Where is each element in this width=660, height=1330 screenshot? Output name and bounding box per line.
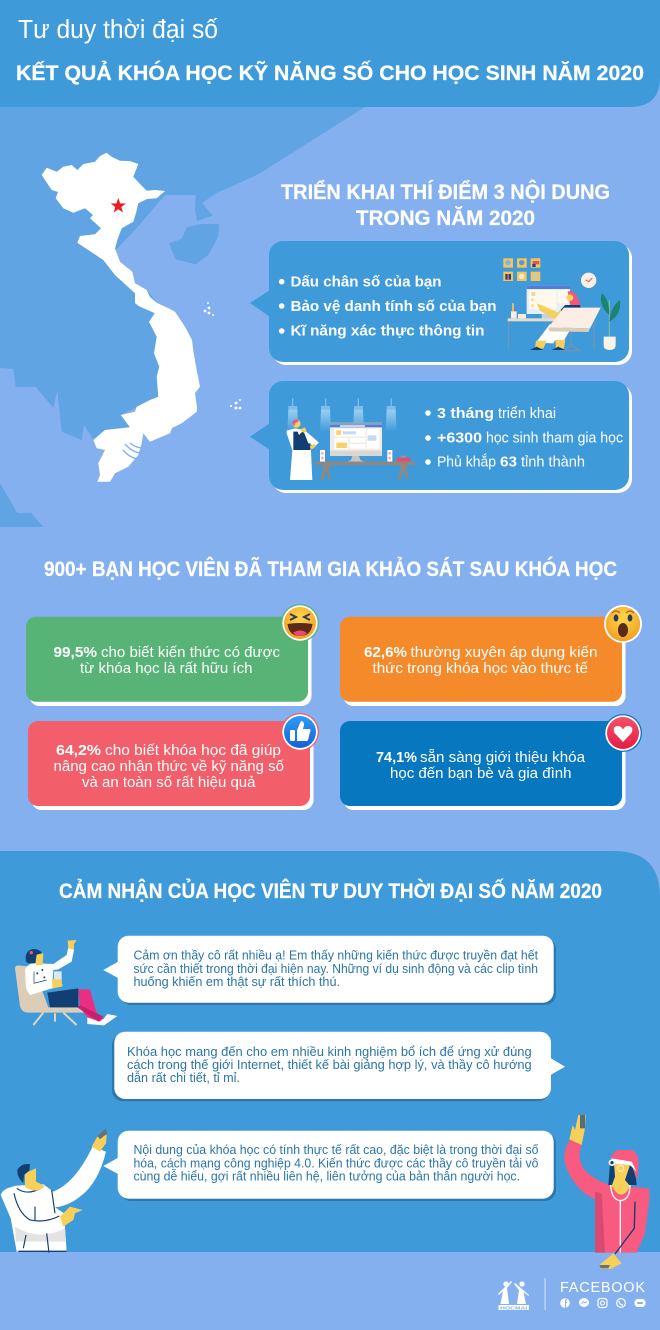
- footer: facebook and social icons: FACEBOOK: [560, 1280, 645, 1296]
- card: 62,6%: 62,6%: [364, 644, 407, 661]
- quote bubble 1: Cảm ơn thầy cô rất nhiều ạ! Em thấy những kiến thức được truyền đạt hết: [134, 948, 539, 962]
- card: 74,1%: [340, 714, 642, 810]
- icon: thumbs up: [281, 713, 319, 751]
- card: 64,2%: [28, 713, 319, 810]
- map of Vietnam: [42, 153, 241, 482]
- card: 64,2%: nâng cao nhận thức về kỹ năng số: [54, 758, 285, 775]
- card: 99,5%: cho biết kiến thức có được: [101, 644, 280, 661]
- quote bubble 2: dẫn rất chi tiết, tỉ mỉ.: [127, 1070, 240, 1085]
- icon: surprised emoji: [604, 605, 642, 643]
- islands: [204, 302, 241, 410]
- heading: feedback: CẢM NHẬN CỦA HỌC VIÊN TƯ DUY THỜI ĐẠI SỐ NĂM 2020: [59, 877, 602, 903]
- card: 74,1%: sẵn sàng giới thiệu khóa: [420, 749, 586, 766]
- quote bubble 3: [103, 1131, 556, 1201]
- heading: pilot: TRIỂN KHAI THÍ ĐIỂM 3 NỘI DUNG: [281, 179, 610, 204]
- footer: logo: [498, 1281, 529, 1310]
- footer divider: [544, 1278, 546, 1310]
- card: 64,2%: 64,2%: [56, 742, 101, 759]
- quote bubble 3: hóa, cách mạng công nghiệp 4.0. Kiến thức được các thầy cô truyền tải vô: [134, 1156, 539, 1170]
- numbers list: triển khai: [498, 406, 556, 422]
- numbers list: 63: [500, 454, 517, 470]
- numbers list: học sinh tham gia học: [486, 430, 623, 446]
- footer: facebook and social icons: [560, 1280, 646, 1308]
- card: 64,2%: cho biết khóa học đã giúp: [105, 742, 281, 759]
- quote bubble 2: cách trong thế giới Internet, thiết kế bài giảng hợp lý, và thầy cô hướng: [127, 1058, 532, 1072]
- quote bubble 2: Khóa học mang đến cho em nhiều kinh nghiệm bổ ích để ứng xử đúng: [127, 1045, 532, 1059]
- panel: student feedback background: [0, 851, 660, 1252]
- panel: key numbers: [250, 381, 632, 493]
- card: 99,5%: [26, 604, 319, 706]
- footer: logo: HOCMAI: [500, 1305, 527, 1310]
- numbers list: 3 tháng: [437, 405, 494, 422]
- icon: laughing emoji: [281, 604, 319, 642]
- main title: KẾT QUẢ KHÓA HỌC KỸ NĂNG SỐ CHO HỌC SINH NĂM 2020: [16, 59, 644, 85]
- heading: pilot: [281, 179, 610, 230]
- quote bubble 3: Nội dung của khóa học có tính thực tế rất cao, đặc biệt là trong thời đại số: [134, 1143, 539, 1157]
- card: 62,6%: [340, 605, 642, 706]
- card: 74,1%: 74,1%: [376, 749, 417, 766]
- card: 62,6%: thường xuyên áp dụng kiến: [410, 644, 598, 661]
- card: 99,5%: từ khóa học là rất hữu ích: [80, 660, 252, 677]
- illustration: seated woman: [15, 940, 117, 1025]
- numbers list: Phủ khắp: [437, 454, 496, 470]
- quote bubble 2: [112, 1032, 565, 1101]
- illustration: man pointing: [1, 1129, 107, 1253]
- topic list: Kĩ năng xác thực thông tin: [290, 322, 484, 340]
- star marker: [111, 198, 126, 212]
- quote bubble 1: sức cần thiết trong thời đại hiện nay. Những ví dụ sinh động và các clip tình: [134, 962, 538, 976]
- numbers list: [425, 405, 623, 470]
- numbers list: tỉnh thành: [521, 454, 585, 470]
- topic list: Dấu chân số của bạn: [290, 274, 442, 290]
- heading: pilot: TRONG NĂM 2020: [356, 205, 535, 230]
- card: 74,1%: học đến bạn bè và gia đình: [390, 765, 572, 782]
- card: 64,2%: và an toàn số rất hiệu quả: [82, 774, 256, 791]
- illustration: man at computer: [287, 398, 415, 480]
- quote bubble 3: cùng dễ hiểu, gợi rất nhiều liên hệ, liên tưởng của bản thân người học.: [134, 1168, 520, 1183]
- subtitle: Tư duy thời đại số: [18, 16, 218, 44]
- illustration: woman at desk: [503, 258, 620, 351]
- card: 62,6%: thức trong khóa học vào thực tế: [372, 660, 589, 677]
- icon: heart: [604, 714, 642, 752]
- header banner: [0, 0, 660, 107]
- panel: three topics: [250, 241, 632, 365]
- quote bubble 1: [103, 936, 556, 1005]
- illustration: woman in pink hat: [564, 1115, 650, 1269]
- topic list: [279, 274, 496, 340]
- land background map: [0, 107, 365, 527]
- quote bubble 1: huống khiến em thật sự rất thích thú.: [134, 975, 340, 989]
- card: 99,5%: 99,5%: [54, 644, 97, 661]
- topic list: Bảo vệ danh tính số của bạn: [290, 298, 496, 315]
- numbers list: +6300: [437, 430, 482, 446]
